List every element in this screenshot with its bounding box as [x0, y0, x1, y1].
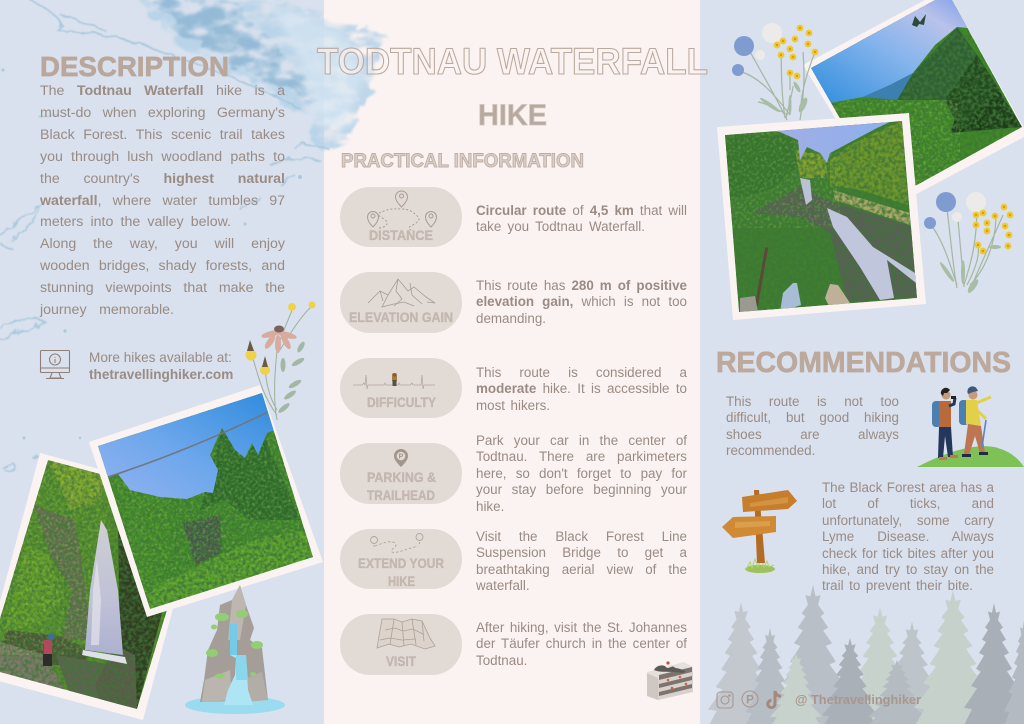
text block: description: The Todtnau Waterfall hike is a — [40, 83, 285, 99]
illustration: two hikers on a hill — [917, 386, 1024, 467]
text block: description: waterfall, where water tumbles 97 — [40, 193, 285, 209]
photo: waterfall cascade with boots — [717, 113, 926, 320]
text: elevation gain: elevation gain, which is not too — [476, 294, 687, 309]
text block: description — [40, 83, 285, 318]
text: extend your hike: Visit the Black Forest Line — [476, 529, 687, 544]
photo: waterfall with hiker — [0, 453, 173, 720]
text: parking: Todtnau. There are parkimeters — [476, 449, 687, 464]
icon: tiktok — [768, 691, 781, 708]
photo: valley and mountains — [800, 0, 1024, 208]
text: visit: Todtnau. — [476, 653, 527, 668]
text: parking — [476, 433, 687, 514]
panel: parking and trailhead pill: TRAILHEAD — [367, 487, 435, 503]
social handle: @ Thetravellinghiker — [795, 692, 921, 707]
heading: description: DESCRIPTION — [40, 51, 229, 82]
illustration: wooden signpost — [722, 490, 797, 573]
title — [317, 41, 708, 132]
flower bouquet middle right — [924, 192, 1013, 294]
text: ticks recommendation: trail to prevent their bite. — [822, 578, 973, 593]
icon: instagram — [717, 692, 733, 708]
text: ticks recommendation: Lyme Disease. Always — [822, 529, 994, 544]
panel: elevation gain pill — [340, 272, 462, 333]
icon: mountains — [368, 279, 435, 307]
text: parking: Park your car in the center of — [476, 433, 687, 448]
text: ticks recommendation: The Black Forest area has a — [822, 480, 994, 495]
panel: extend your hike pill: HIKE — [388, 573, 415, 589]
illustration: cartoon waterfall — [185, 585, 285, 714]
icon: parking pin: P — [399, 454, 404, 460]
link text: more hikes: More hikes available at: — [89, 350, 232, 365]
text: parking: your stay before beginning your — [476, 482, 687, 497]
text: visit — [476, 620, 687, 668]
text: extend your hike: waterfall. — [476, 578, 530, 593]
text: elevation gain — [476, 278, 687, 326]
text: distance: Circular route of 4,5 km that will — [476, 203, 687, 218]
text block: description: wooden bridges, shady forests, and — [40, 258, 285, 274]
text: visit: After hiking, visit the St. Johannes — [476, 620, 687, 635]
panel: parking and trailhead pill — [340, 443, 462, 504]
text block: description: the country's highest natural — [40, 171, 285, 187]
panel: difficulty pill: DIFFICULTY — [367, 394, 437, 410]
title line: Hike: HIKE — [478, 99, 547, 132]
text: hiking shoes recommendation: This route is not too — [726, 394, 899, 409]
panel: parking and trailhead pill: PARKING & — [367, 469, 436, 485]
text: parking: hike. — [476, 499, 504, 514]
panel: distance pill — [340, 187, 462, 247]
text: distance — [476, 203, 687, 234]
panel: visit pill — [340, 614, 462, 675]
text block: description: stunning viewpoints that make the — [40, 280, 285, 296]
text: distance: take you Todtnau Waterfall. — [476, 219, 645, 234]
title line: Todtnau Waterfall: TODTNAU WATERFALL — [317, 41, 708, 82]
icon: black forest cake — [647, 661, 693, 700]
link text: more hikes: thetravellinghiker.com — [89, 367, 233, 382]
text: difficulty — [476, 365, 687, 413]
heading: recommendations: RECOMMENDATIONS — [716, 347, 1011, 379]
text block: description: journey memorable. — [40, 302, 174, 318]
hiker with binoculars — [932, 388, 958, 460]
text block: description: must-do when exploring Germany's — [40, 105, 285, 121]
flower bouquet near description — [246, 302, 316, 420]
panel: visit pill: VISIT — [386, 653, 416, 669]
panel: centre cream column — [324, 0, 700, 724]
icon: route with pins — [368, 191, 436, 230]
text: ticks recommendation: hike, and try to stay on the — [822, 562, 994, 577]
photo: suspension bridge over forest — [89, 385, 330, 620]
text: ticks recommendation: lot of ticks, and — [822, 496, 994, 511]
panel: extend your hike pill — [340, 529, 462, 589]
panel: difficulty pill — [340, 358, 462, 418]
text: hiking shoes recommendation: difficult, but good hiking — [726, 410, 899, 425]
text: difficulty: most hikers. — [476, 398, 550, 413]
text: parking: here, so don't forget to pay for — [476, 466, 687, 481]
text block: description: Black Forest. This scenic trail takes — [40, 127, 285, 143]
icon: monitor with info symbol — [40, 350, 70, 378]
text block: description: Along the way, you will enjoy — [40, 236, 285, 252]
text: hiking shoes recommendation — [726, 394, 899, 458]
text: hiking shoes recommendation: recommended. — [726, 443, 815, 458]
text: difficulty: This route is considered a — [476, 365, 687, 380]
text block: description: meters into the valley below. — [40, 214, 231, 230]
icon: folded map — [377, 619, 435, 649]
text block: description: you through lush woodland paths to — [40, 149, 285, 165]
panel: distance pill: DISTANCE — [369, 227, 433, 243]
heading: practical information: PRACTICAL INFORMATION — [341, 150, 584, 172]
water splash — [0, 0, 385, 472]
flower bouquet top right — [732, 23, 818, 120]
panel: elevation gain pill: ELEVATION GAIN — [349, 309, 453, 325]
text: ticks recommendation — [822, 480, 994, 593]
text: elevation gain: demanding. — [476, 311, 546, 326]
text: extend your hike: breathtaking aerial view of the — [476, 562, 687, 577]
social icons — [717, 691, 781, 708]
icon: pinterest: P — [746, 692, 754, 706]
text: hiking shoes recommendation: shoes are always — [726, 427, 899, 442]
icon: heartbeat line with hiker — [353, 373, 435, 389]
text: ticks recommendation: unfortunately, some carry — [822, 513, 994, 528]
text: ticks recommendation: check for tick bites after you — [822, 546, 994, 561]
icon: dashed trail with pins — [370, 534, 423, 552]
text: extend your hike: Suspension Bridge to get a — [476, 545, 687, 560]
hiker pointing — [959, 386, 991, 457]
panel: extend your hike pill: EXTEND YOUR — [358, 555, 444, 571]
text: extend your hike — [476, 529, 687, 593]
forest — [708, 585, 1024, 724]
text: difficulty: moderate hike. It is accessible to — [476, 381, 687, 396]
text: visit: der Täufer church in the center of — [476, 636, 687, 651]
link text: more hikes — [89, 350, 233, 382]
text: elevation gain: This route has 280 m of positive — [476, 278, 687, 293]
